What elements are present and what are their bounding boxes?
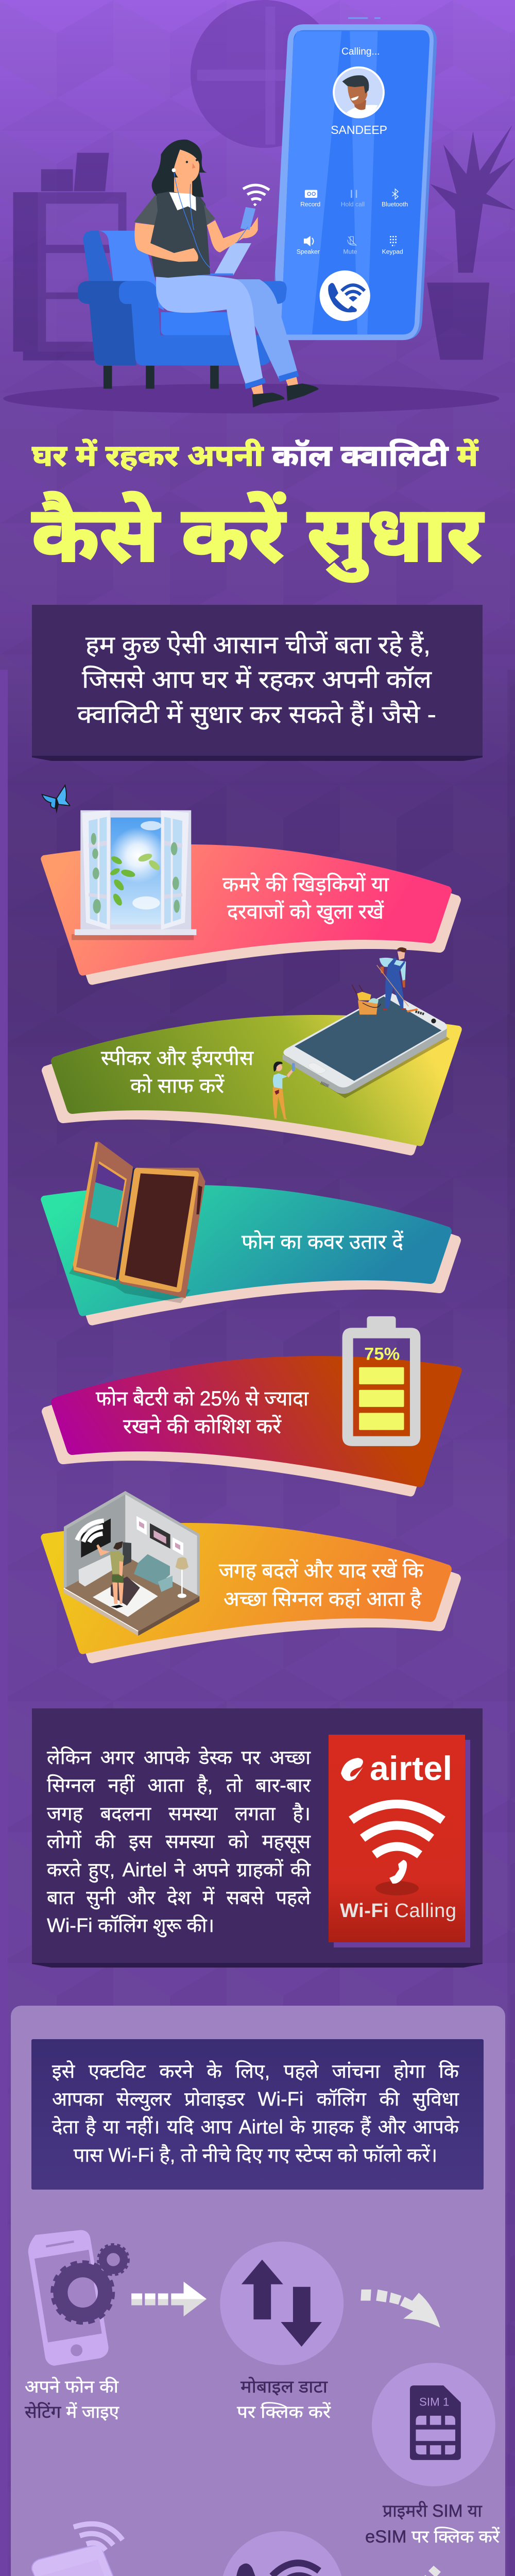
airtel paragraph bbox=[46, 1747, 311, 1937]
title: कैसे करें सुधार bbox=[32, 491, 484, 582]
icon: isometric room bbox=[64, 1491, 199, 1636]
call controls: Mute bbox=[343, 248, 357, 255]
leaves bbox=[91, 833, 180, 913]
step 4: wifi calling icon bbox=[220, 2531, 344, 2576]
step 1 label bbox=[25, 2377, 119, 2422]
tv and wifi bbox=[81, 1518, 111, 1557]
banner 5 bbox=[41, 1523, 461, 1663]
person bbox=[112, 1583, 124, 1604]
banner 1: कमरे की खिड़कियों या bbox=[222, 873, 389, 896]
airtel paragraph: जगह बदलना समस्या लगता है। bbox=[47, 1803, 311, 1825]
room silhouette bbox=[3, 0, 515, 413]
call controls: Bluetooth bbox=[382, 201, 408, 208]
icon: open window bbox=[72, 810, 196, 940]
arrow 2 bbox=[360, 2290, 440, 2328]
big phone: SANDEEP bbox=[331, 123, 387, 137]
step 2 label bbox=[237, 2377, 331, 2422]
icon: flip phone cover bbox=[69, 1142, 205, 1303]
step 3 label: प्राइमरी SIM या bbox=[383, 2501, 483, 2521]
banner 2: स्पीकर और ईयरपीस bbox=[101, 1046, 254, 1070]
call button bbox=[320, 270, 370, 321]
banner 5: अच्छा सिग्नल कहां आता है bbox=[224, 1587, 422, 1611]
intro panel: क्वालिटी में सुधार कर सकते हैं। जैसे - bbox=[77, 700, 436, 730]
step 5: phone with toggle bbox=[29, 2524, 150, 2576]
airtel info panel bbox=[32, 1708, 483, 1968]
icon: battery 75% bbox=[342, 1316, 420, 1446]
activation paragraph: आपका सेल्युलर प्रोवाइडर Wi-Fi कॉलिंग की सुविधा bbox=[52, 2089, 459, 2110]
hero illustration bbox=[3, 0, 515, 413]
banner 5: जगह बदलें और याद रखें कि bbox=[219, 1559, 424, 1582]
banner 2 bbox=[42, 1015, 462, 1156]
armchair bbox=[78, 231, 287, 389]
icon: battery 75%: 75% bbox=[364, 1345, 400, 1364]
call controls: Record bbox=[300, 201, 320, 208]
step 1 label: सेटिंग में जाइए bbox=[25, 2402, 119, 2422]
banner 2: को साफ करें bbox=[130, 1074, 225, 1097]
activation paragraph: देता है या नहीं। यदि आप Airtel के ग्राहक हैं और आपके bbox=[52, 2116, 459, 2138]
step 3 label bbox=[365, 2501, 500, 2547]
banner 4 bbox=[42, 1356, 462, 1497]
big phone: Calling... bbox=[341, 46, 380, 57]
furniture bbox=[79, 1554, 113, 1586]
step 2 label: पर क्लिक करें bbox=[237, 2402, 331, 2422]
intro panel: हम कुछ ऐसी आसान चीजें बता रहे हैं, bbox=[85, 631, 431, 660]
airtel paragraph: सिग्नल नहीं आता है, तो बार-बार bbox=[47, 1775, 311, 1797]
banner 3: फोन का कवर उतार दें bbox=[242, 1230, 404, 1253]
call controls: Speaker bbox=[297, 248, 320, 255]
airtel paragraph: लोगों की इस समस्या को महसूस bbox=[47, 1831, 311, 1853]
banner 1: दरवाजों को खुला रखें bbox=[227, 900, 384, 924]
arrow 1 bbox=[131, 2282, 207, 2316]
big phone bbox=[274, 24, 437, 340]
step 3: sim icon: SIM 1 bbox=[419, 2396, 449, 2409]
banner 4: रखने की कोशिश करें bbox=[123, 1415, 282, 1438]
icon: smartphone with cleaners bbox=[273, 947, 450, 1120]
step 1 label: अपने फोन की bbox=[25, 2377, 119, 2397]
step 2: mobile data icon bbox=[220, 2242, 344, 2365]
status dashes bbox=[348, 17, 381, 19]
call controls: Keypad bbox=[382, 248, 403, 255]
steps panel bbox=[11, 2006, 505, 2576]
airtel wifi calling image: Wi-Fi Calling bbox=[340, 1900, 456, 1922]
activation paragraph bbox=[52, 2060, 459, 2166]
airtel wifi calling image: airtel bbox=[370, 1749, 452, 1787]
step 2 label: मोबाइल डाटा bbox=[241, 2377, 328, 2397]
icon: butterfly bbox=[42, 785, 70, 814]
banner 3 bbox=[41, 1185, 461, 1325]
airtel paragraph: Wi-Fi कॉलिंग शुरू की। bbox=[47, 1915, 214, 1937]
call controls bbox=[297, 189, 408, 255]
arrow 3 bbox=[358, 2566, 441, 2576]
airtel paragraph: बात सुनी और देश में सबसे पहले bbox=[47, 1887, 311, 1909]
step 3: sim icon bbox=[372, 2363, 495, 2486]
activation paragraph: पास Wi-Fi है, तो नीचे दिए गए स्टेप्स को फॉलो करें। bbox=[74, 2145, 437, 2166]
mop bucket bbox=[352, 985, 381, 1018]
man with mop bbox=[377, 947, 418, 1012]
airtel paragraph: करते हुए, Airtel ने अपने ग्राहकों की bbox=[47, 1859, 311, 1881]
step 3 label: eSIM पर क्लिक करें bbox=[365, 2527, 500, 2547]
call controls: Hold call bbox=[341, 201, 365, 208]
banner 4: फोन बैटरी को 25% से ज्यादा bbox=[96, 1387, 309, 1410]
activation paragraph: इसे एक्टविट करने के लिए, पहले जांचना होगा कि bbox=[52, 2061, 459, 2082]
banner 1 bbox=[41, 844, 461, 985]
title bbox=[32, 439, 484, 582]
intro panel: जिससे आप घर में रहकर अपनी कॉल bbox=[82, 665, 433, 693]
woman on chair bbox=[134, 140, 319, 408]
step 1: settings icon bbox=[28, 2230, 128, 2366]
intro panel bbox=[32, 605, 483, 761]
avatar bbox=[334, 67, 384, 117]
wall art and lamp bbox=[136, 1516, 147, 1535]
woman wiping bbox=[273, 1062, 295, 1120]
wifi above hand bbox=[243, 185, 269, 207]
title: घर में रहकर अपनी कॉल क्वालिटी में bbox=[32, 439, 478, 472]
airtel paragraph: लेकिन अगर आपके डेस्क पर अच्छा bbox=[47, 1747, 311, 1769]
airtel wifi calling image bbox=[329, 1735, 470, 1947]
